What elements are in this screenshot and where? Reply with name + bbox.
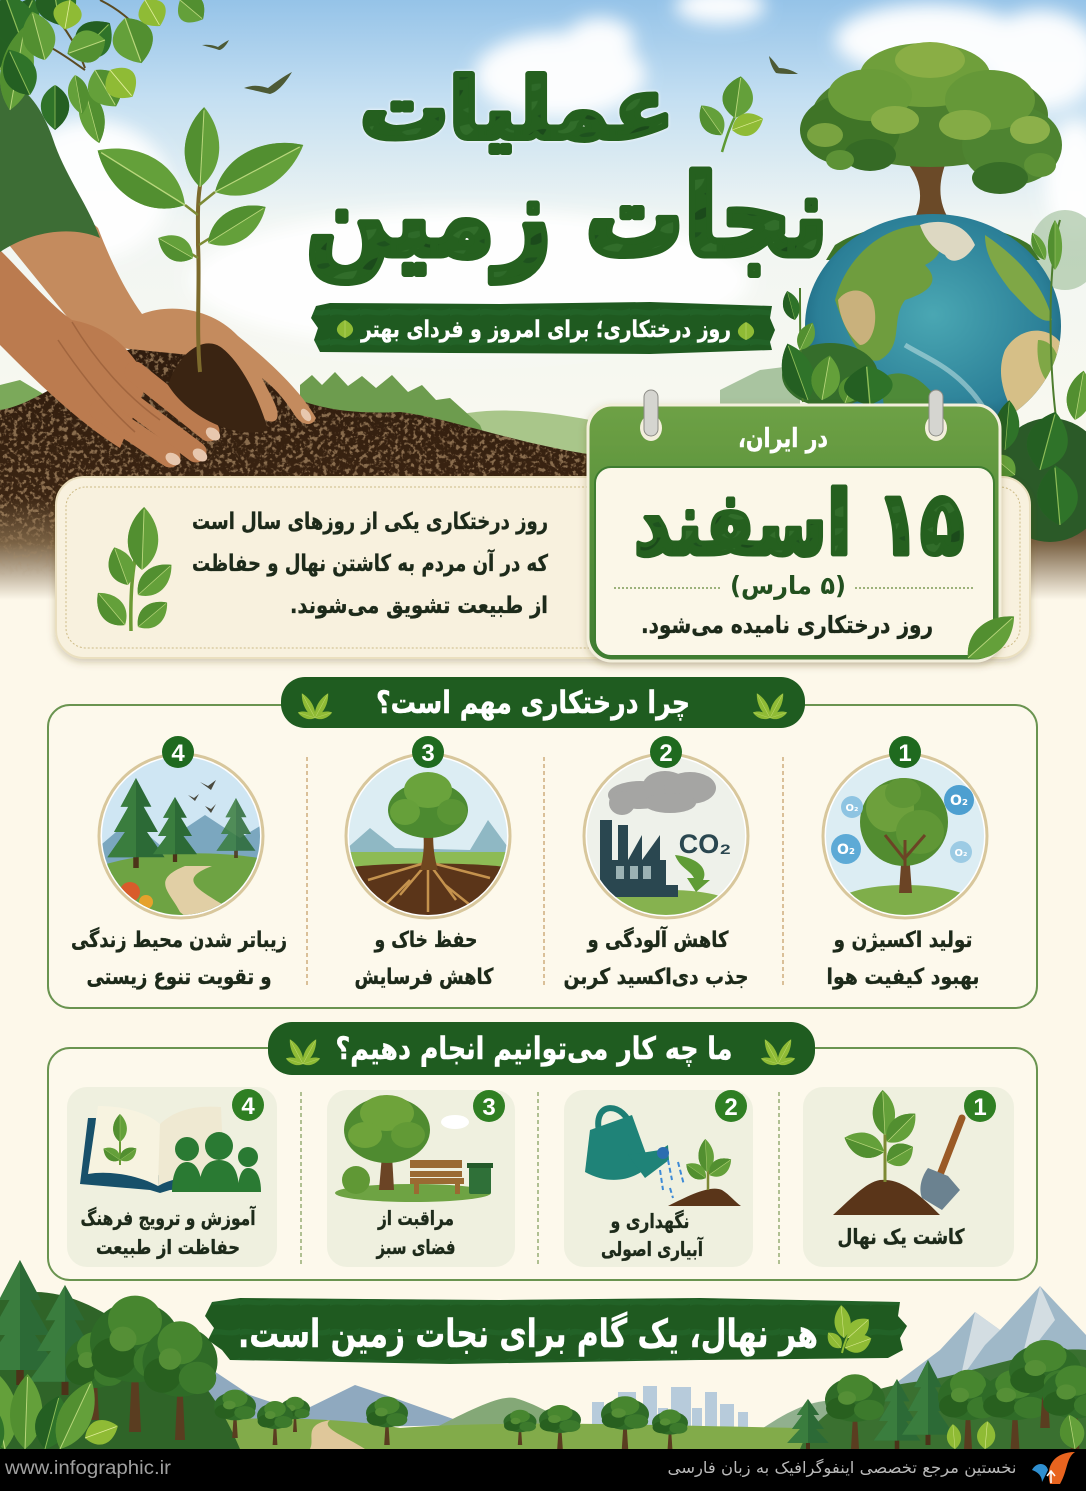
foreground leaves: [0, 1362, 1086, 1456]
icon: sprout: [89, 507, 180, 636]
gregorian date with dotted rule: (۵ مارس): [730, 571, 846, 600]
item 4: beautiful environment: 4: [171, 740, 185, 767]
action 4: education: [67, 1087, 277, 1267]
action 1: plant a sapling: کاشت یک نهال: [838, 1225, 965, 1249]
footer bar: www.infographic.ir: [4, 1458, 172, 1479]
calendar rings: [640, 390, 947, 441]
item 2: pollution and CO2: کاهش آلودگی و: [587, 925, 729, 953]
action 1: plant a sapling: [803, 1087, 1014, 1267]
footer bar: [0, 1449, 1086, 1491]
action 1: plant a sapling: 1: [973, 1094, 987, 1121]
subtitle banner: [311, 302, 775, 354]
intro text: روز درختکاری یکی از روزهای سال است: [192, 509, 548, 535]
item 1: oxygen: [820, 736, 990, 990]
item 1: oxygen: 1: [898, 740, 912, 767]
heading pill: ما چه کار می‌توانیم انجام دهیم؟: [336, 1031, 732, 1067]
item 2: pollution and CO2: 2: [659, 740, 673, 767]
item 1: oxygen: بهبود کیفیت هوا: [826, 965, 980, 990]
action 3: green space care: 3: [482, 1094, 496, 1121]
heading pill: [268, 1022, 815, 1075]
item 4: beautiful environment: [71, 736, 287, 990]
intro text: که در آن مردم به کاشتن نهال و حفاظت: [192, 548, 548, 577]
action 3: green space care: فضای سبز: [376, 1235, 456, 1259]
date: ۱۵ اسفند: [634, 472, 964, 575]
action 3: green space care: [327, 1090, 515, 1267]
heading pill: [281, 677, 805, 728]
item 3: soil and roots: حفظ خاک و: [374, 928, 478, 953]
intro text: [192, 509, 548, 619]
action 4: education: حفاظت از طبیعت: [96, 1235, 240, 1259]
bottom landscape: [0, 1260, 1086, 1456]
item 3: soil and roots: [340, 736, 515, 990]
right forest: [787, 1340, 1086, 1449]
item 2: pollution and CO2: CO₂: [679, 829, 731, 859]
sleeve: [0, 78, 100, 252]
item 4: beautiful environment: زیباتر شدن محیط زندگی: [71, 926, 287, 953]
item 2: pollution and CO2: جذب دی‌اکسید کربن: [564, 965, 748, 990]
item 1: oxygen: تولید اکسیژن و: [833, 928, 972, 953]
panel: why tree planting matters: [48, 677, 1037, 1008]
panel: what we can do: [48, 1022, 1037, 1280]
soil mound: [0, 342, 1086, 610]
title: [306, 60, 828, 282]
item 4: beautiful environment: و تقویت تنوع زیستی: [86, 965, 272, 990]
intro text: از طبیعت تشویق می‌شوند.: [290, 593, 548, 619]
icon: infographic logo: [1032, 1452, 1075, 1484]
left forest: [0, 1260, 688, 1449]
sapling: [85, 106, 313, 372]
calendar card: [588, 390, 1024, 669]
item 3: soil and roots: 3: [421, 740, 435, 767]
item 1: oxygen: O₂: [955, 848, 967, 859]
heading pill: چرا درختکاری مهم است؟: [376, 685, 690, 721]
calendar card: روز درختکاری نامیده می‌شود.: [641, 611, 933, 639]
icon: title leaf sprig: [692, 74, 767, 152]
city skyline: [592, 1386, 748, 1432]
bottom slogan banner: هر نهال، یک گام برای نجات زمین است.: [238, 1311, 818, 1357]
foliage around globe: [773, 220, 1086, 542]
action 2: watering: نگهداری و: [610, 1209, 690, 1233]
clouds: [10, 0, 1086, 350]
title: نجات زمین: [306, 152, 828, 282]
item 1: oxygen: O₂: [950, 793, 968, 809]
calendar card: در ایران،: [738, 424, 828, 454]
action 3: green space care: مراقبت از: [377, 1206, 454, 1230]
distant treeline and hills: [0, 210, 1086, 470]
title: عملیات: [360, 60, 674, 158]
subtitle banner: روز درختکاری؛ برای امروز و فردای بهتر: [360, 317, 731, 343]
intro panel: [56, 477, 1030, 658]
top-left branch leaves: [0, 0, 212, 146]
big tree on globe: [800, 42, 1062, 224]
birds: [202, 40, 798, 94]
action 2: watering: آبیاری اصولی: [601, 1236, 704, 1261]
item 1: oxygen: O₂: [846, 803, 858, 814]
globe: [805, 214, 1061, 416]
action 4: education: آموزش و ترویج فرهنگ: [80, 1205, 256, 1230]
action 2: watering: [564, 1090, 753, 1267]
item 2: pollution and CO2: [564, 736, 750, 990]
item 1: oxygen: O₂: [837, 842, 855, 858]
bottom slogan banner: [205, 1298, 907, 1364]
hands planting sapling: [0, 212, 316, 468]
action 2: watering: 2: [724, 1094, 738, 1121]
item 3: soil and roots: کاهش فرسایش: [354, 965, 494, 990]
action 4: education: 4: [241, 1093, 255, 1120]
footer bar: نخستین مرجع تخصصی اینفوگرافیک به زبان فارسی: [668, 1458, 1016, 1478]
